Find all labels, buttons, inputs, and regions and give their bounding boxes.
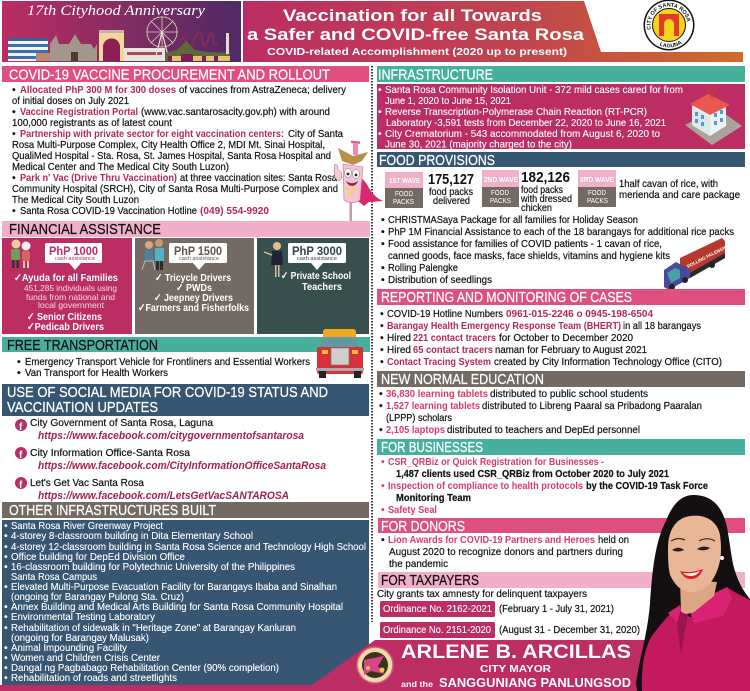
panel: project list: •: [4, 611, 8, 623]
card: PhP 1000: ✓Ayuda for all Families: [14, 272, 118, 284]
card: PhP 1500: ✓ PWDs: [176, 282, 212, 294]
text: third wave description: [619, 178, 740, 201]
panel: project list: •: [4, 652, 8, 664]
heading: NEW NORMAL EDUCATION: [381, 372, 544, 388]
heading: FOR TAXPAYERS: [381, 573, 479, 589]
panel: infrastructure list: Santa Rosa Community Isolation Unit - 372 mild cases cared for from: [385, 84, 683, 96]
section: reporting and monitoring: [377, 289, 745, 368]
link: City Government: City Government of Santa Rosa, Laguna: [30, 417, 213, 429]
divider: dotted centre line: [371, 66, 373, 622]
icon: syringe mascot: [334, 141, 383, 223]
panel: infrastructure list: City Crematorium - 543 accommodated from August 6, 2020 to: [385, 128, 660, 140]
bullet list: •: [12, 84, 16, 96]
card: PhP 3000: ✓ Private School: [281, 270, 351, 282]
bullet list: •: [381, 238, 385, 250]
bullet list: 0961-015-2246 o 0945-198-6504: [506, 308, 653, 320]
panel: project list: Rehabilitation of roads and streetlights: [11, 672, 177, 684]
text: third wave description: merienda and care package: [619, 189, 740, 201]
panel: project list: Women and Children Crisis Center: [11, 652, 160, 664]
bullet list: Safety Seal: [388, 504, 437, 516]
bullet list: •: [381, 456, 385, 468]
panel: project list: Office building for DepEd Division Office: [11, 551, 185, 563]
bullet list: naman for February to August 2021: [495, 344, 647, 356]
illustration: city skyline: [8, 16, 230, 61]
stat: 175,127: food packs: [429, 186, 473, 198]
bullet list: in all 18 barangays: [623, 320, 701, 332]
bullet list: •: [380, 308, 384, 320]
bullet list: Van Transport for Health Workers: [25, 367, 168, 379]
card: PhP 1000: [2, 238, 132, 334]
bullet list: CHRISTMASaya Package for all families for Holiday Season: [388, 214, 638, 226]
icon: jeepney: [316, 329, 364, 378]
text: third wave description: 1half cavan of rice, with: [619, 178, 718, 190]
panel: project list: Annex Building and Medical Arts Building for Santa Rosa Community Hospital: [11, 601, 343, 613]
smile: [680, 569, 703, 579]
bullet list: created by City Information Technology Office (CITO): [494, 356, 722, 368]
bullet list: Santa Rosa COVID-19 Vaccination Hotline: [20, 205, 197, 217]
stat: 175,127: [428, 171, 474, 207]
panel: project list: Dangal ng Pagbabago Rehabilitation Center (90% completion): [11, 662, 279, 674]
stat: 182,126: 182,126: [521, 169, 570, 186]
bullet list: Monitoring Team: [396, 492, 471, 504]
bullet list: •: [380, 320, 384, 332]
bullet list: Distribution of seedlings: [388, 274, 492, 286]
text: period two: (August 31 - December 31, 2020): [499, 624, 640, 636]
bullet list: 1,527 learning tablets: [386, 400, 480, 412]
heading: COVID-19 VACCINE PROCUREMENT AND ROLLOUT: [9, 68, 330, 84]
subtitle: COVID-related Accomplishment (2020 up to present): [267, 47, 567, 58]
bullet list: Allocated PhP 300 M for 300 doses: [20, 84, 176, 96]
panel: infrastructure list: June 30, 2021 (majority charged to the city): [385, 138, 572, 150]
bullet list: 221 contact tracers: [413, 332, 496, 344]
card: PhP 1500: ✓ Jeepney Drivers: [154, 292, 233, 304]
link: City Government: [15, 417, 304, 442]
badge: 1st wave: [385, 172, 423, 208]
bullet list: Food assistance for families of COVID patients - 1 cavan of rice,: [388, 238, 662, 250]
bullet list: •: [379, 388, 383, 400]
badge: ordinance 2162-2021: Ordinance No. 2162-2021: [383, 603, 492, 615]
stat: 182,126: with dressed: [520, 193, 572, 205]
portrait: mayor: [636, 495, 750, 691]
section: food provisions: [377, 152, 745, 290]
heading: OTHER INFRASTRUCTURES BUILT: [9, 503, 216, 519]
panel: project list: Santa Rosa Campus: [11, 571, 97, 583]
bullet list: [380, 308, 722, 368]
callout: cash assistance: [179, 256, 219, 262]
link: Let's Get Vac: f: [19, 480, 23, 491]
face: [668, 516, 721, 592]
icon: people: [142, 239, 164, 270]
bullet list: •: [12, 172, 16, 184]
bullet list: Vaccine Registration Portal: [20, 106, 138, 118]
bullet list: Medical Center and The Medical City South Luzon): [12, 161, 229, 173]
panel: anniversary banner: [2, 1, 241, 62]
panel: project list: •: [4, 551, 8, 563]
badge: 1st wave: FOOD: [395, 191, 413, 198]
card: PhP 1000: ✓ Senior Citizens: [27, 311, 102, 323]
panel: project list: Environmental Testing Laboratory: [11, 611, 156, 623]
icon: city seal: [644, 0, 694, 50]
panel: project list: Elevated Multi-Purpose Evacuation Facility for Barangays Ibaba and Sinalhan: [11, 581, 337, 593]
stat: 175,127: 175,127: [428, 171, 474, 188]
panel: infrastructure list: Reverse Transcription-Polymerase Chain Reaction (RT-PCR): [385, 106, 647, 118]
panel: project list: [2, 520, 369, 685]
stat: 182,126: food packs: [521, 184, 563, 196]
bullet list: Rosa Multi-Purpose Complex, City Health Office 2, MDI Mt. Sinai Hospital,: [12, 139, 325, 151]
link: City Government: https://www.facebook.com/citygovernmentofsantarosa: [38, 430, 304, 442]
bullet list: QualiMed Hospital - Sta. Rosa, St. James Hospital, Santa Rosa Hospital and: [12, 150, 331, 162]
panel: project list: •: [4, 561, 8, 573]
badge: 2nd wave: FOOD: [491, 190, 509, 197]
icon: city seal: LAGUNA: [660, 40, 682, 48]
bullet list: [17, 356, 310, 379]
bullet list: •: [381, 480, 385, 492]
link: Let's Get Vac: Let's Get Vac Santa Rosa: [30, 477, 144, 489]
role: city mayor: CITY MAYOR: [480, 664, 552, 675]
badge: 2nd wave: 2ND WAVE: [484, 177, 518, 184]
section: vaccine procurement and rollout: [2, 66, 369, 217]
badge: 2nd wave: [482, 170, 519, 207]
title line two: a Safer and COVID-free Santa Rosa: [247, 25, 585, 44]
bullet list: distributed to public school students: [490, 388, 648, 400]
panel: title banner: [243, 1, 743, 62]
panel: infrastructure list: Laboratory -3,591 tests from December 22, 2020 to June 16, 2021: [386, 117, 666, 129]
text: period one: (February 1 - July 31, 2021): [499, 603, 614, 615]
bullet text: August 2020 to recognize donors and partners during: [389, 546, 623, 558]
stat: 182,126: chicken: [521, 202, 552, 214]
bullet list: [12, 84, 347, 217]
link: City Information Office: f: [19, 450, 23, 461]
bullet list: 36,830 learning tablets: [386, 388, 488, 400]
link: Let's Get Vac: https://www.facebook.com/LetsGetVacSANTAROSA: [38, 490, 289, 502]
section: infrastructure: [377, 66, 745, 150]
line: and the Sangguniang Panlungsod: and the: [401, 679, 433, 689]
link: City Information Office: City Information Office-Santa Rosa: [30, 447, 190, 459]
bullet list: •: [381, 274, 385, 286]
bullet list: 65 contact tracers: [413, 344, 493, 356]
badge: 3rd wave: PACKS: [587, 198, 608, 205]
bullet list: Rolling Palengke: [388, 262, 458, 274]
badge: 1st wave: 1ST WAVE: [389, 178, 420, 185]
bullet list: 2,105 laptops: [386, 424, 445, 436]
heading: INFRASTRUCTURE: [378, 68, 493, 84]
panel: project list: (ongoing for Barangay Malusak): [11, 632, 149, 644]
bullet list: •: [381, 262, 385, 274]
panel: project list: (ongoing for Barangay Pulong Sta. Cruz): [11, 591, 184, 603]
bullet list: canned goods, face masks, face shields, vitamins and hygiene kits: [388, 250, 670, 262]
bullet list: •: [380, 356, 384, 368]
bullet text: held on: [598, 534, 629, 546]
heading: FOR DONORS: [381, 519, 465, 535]
callout: cash assistance: [297, 256, 337, 262]
bullet list: •: [381, 504, 385, 516]
bullet list: [381, 214, 734, 286]
earring: [720, 556, 724, 560]
panel: project list: •: [4, 662, 8, 674]
bullet list: 1,487 clients used CSR_QRBiz from October 2020 to July 2021: [396, 468, 669, 480]
heading: VACCINATION UPDATES: [7, 400, 158, 416]
heading: FOOD PROVISIONS: [379, 153, 495, 169]
bullet list: Inspection of compliance to health protocols: [388, 480, 583, 492]
bullet list: •: [380, 344, 384, 356]
icon: senior couple: [11, 240, 30, 268]
section: for taxpayers: [377, 572, 745, 638]
callout: PhP 1000: [49, 246, 98, 258]
section: social media: [2, 384, 369, 502]
bullet list: 100,000 registrants as of latest count: [12, 117, 172, 129]
heading: FINANCIAL ASSISTANCE: [9, 222, 161, 238]
panel: infrastructure list: •: [378, 106, 382, 118]
badge: ordinance 2162-2021: [380, 601, 495, 617]
panel: project list: •: [4, 622, 8, 634]
bullet list: at three vaccination sites: Santa Rosa: [180, 172, 337, 184]
icon: teacher: [264, 242, 283, 277]
brows and eyes: [671, 539, 715, 552]
panel: project list: 4-storey 8-classroom building in Dita Elementary School: [11, 530, 253, 542]
text: tax amnesty: City grants tax amnesty for delinquent taxpayers: [377, 588, 587, 600]
bullet list: Partnership with private sector for eight vaccination centers:: [20, 128, 284, 140]
callout: [45, 243, 102, 270]
bullet text: •: [381, 534, 385, 546]
panel: project list: 4-storey 12-classroom building in Santa Rosa Science and Technology High School: [11, 541, 366, 553]
bullet list: Emergency Transport Vehicle for Frontliners and Essential Workers: [25, 356, 310, 368]
bullet list: COVID-19 Hotline Numbers: [387, 308, 503, 320]
bullet list: by the COVID-19 Task Force: [586, 480, 708, 492]
line: and the Sangguniang Panlungsod: SANGGUNIANG PANLUNGSOD: [439, 675, 631, 690]
bullet list: [381, 456, 708, 516]
panel: infrastructure list: June 1, 2020 to June 15, 2021: [385, 95, 511, 107]
panel: project list: Animal Impounding Facility: [11, 642, 128, 654]
bullet list: Barangay Health Emergency Response Team (BHERT): [387, 320, 621, 332]
badge: 3rd wave: [578, 170, 616, 207]
card: PhP 1000: ✓Pedicab Drivers: [27, 321, 104, 333]
bullet list: for October to December 2020: [499, 332, 633, 344]
callout: cash assistance: [55, 256, 95, 262]
section: other infrastructures built: [2, 502, 369, 685]
callout: PhP 3000: [292, 246, 342, 258]
name: Arlene B. Arcillas: ARLENE B. ARCILLAS: [401, 642, 631, 663]
bullet text: the pandemic: [389, 558, 448, 570]
panel: project list: •: [4, 601, 8, 613]
card: PhP 3000: Teachers: [302, 281, 342, 293]
bullet list: distributed to teachers and DepEd personnel: [447, 424, 640, 436]
bullet list: •: [381, 214, 385, 226]
bullet list: •: [12, 106, 16, 118]
panel: project list: •: [4, 581, 8, 593]
badge: 3rd wave: FOOD: [588, 190, 606, 197]
bullet list: Contact Tracing System: [387, 356, 491, 368]
card: PhP 1500: ✓Farmers and Fisherfolks: [138, 302, 249, 314]
icon: sangguniang seal: [357, 647, 393, 683]
bullet text: [381, 534, 629, 570]
card: PhP 1000: funds from national and: [26, 292, 115, 302]
bullet list: The Medical City South Luzon: [12, 194, 139, 206]
card: PhP 1500: [135, 238, 254, 334]
panel: infrastructure list: [377, 84, 745, 150]
panel: project list: Santa Rosa River Greenway Project: [11, 520, 163, 532]
bullet list: (LPPP) scholars: [386, 412, 452, 424]
icon: isolation building: [685, 86, 742, 145]
panel: project list: Rehabilitation of sidewalk in "Heritage Zone" at Barangay Kanluran: [11, 622, 296, 634]
title line one: Vaccination for all Towards: [283, 6, 542, 25]
bullet list: •: [379, 400, 383, 412]
shirt: [642, 587, 750, 691]
bullet list: (049) 554-9920: [200, 205, 269, 217]
icon: rolling palengke truck: ROLLING PALENGKE: [686, 243, 730, 269]
panel: project list: 16-classroom building for Polytechnic University of the Philippines: [11, 561, 295, 573]
panel: infrastructure list: •: [378, 84, 382, 96]
bullet list: Hired: [387, 332, 411, 344]
bullet list: •: [381, 226, 385, 238]
heading: 17th Cityhood Anniversary: 17th Cityhood Anniversary: [27, 3, 205, 19]
panel: infrastructure list: •: [378, 128, 382, 140]
stat: 182,126: [520, 169, 572, 214]
bullet list: •: [17, 356, 21, 368]
bullet list: •: [379, 424, 383, 436]
bullet list: •: [12, 128, 16, 140]
heading: USE OF SOCIAL MEDIA FOR COVID-19 STATUS AND: [7, 385, 328, 401]
link: City Information Office: [15, 447, 326, 472]
panel: project list: •: [4, 520, 8, 532]
icon: rolling palengke truck: [664, 238, 730, 290]
section: for donors: [378, 518, 745, 570]
icon: city seal: CITY OF SANTA ROSA: [646, 2, 690, 30]
badge: 3rd wave: 3RD WAVE: [580, 177, 614, 184]
heading: REPORTING AND MONITORING OF CASES: [381, 290, 632, 306]
heading: [7, 385, 328, 416]
bullet list: (www.vac.santarosacity.gov.ph) with around: [141, 106, 330, 118]
panel: project list: •: [4, 642, 8, 654]
panel: project list: •: [4, 672, 8, 684]
bullet list: [379, 388, 702, 436]
heading: FREE TRANSPORTATION: [7, 338, 158, 354]
link: City Information Office: https://www.facebook.com/CityInformationOfficeSantaRosa: [38, 460, 326, 472]
footer band: [0, 640, 750, 691]
neck: [680, 580, 717, 614]
link: Let's Get Vac: [15, 477, 289, 502]
callout: PhP 1500: [174, 246, 222, 258]
badge: 1st wave: PACKS: [393, 199, 414, 206]
callout: [169, 243, 227, 270]
badge: ordinance 2151-2020: Ordinance No. 2151-2020: [383, 624, 491, 636]
bullet list: City of Santa: [288, 128, 343, 140]
link: City Government: f: [19, 422, 23, 433]
badge: 2nd wave: PACKS: [490, 198, 511, 205]
card: PhP 1000: 451,285 individuals using: [24, 283, 117, 293]
section: for businesses: [377, 439, 745, 516]
badge: ordinance 2151-2020: [380, 622, 495, 638]
bullet list: •: [380, 332, 384, 344]
bullet list: •: [17, 367, 21, 379]
section: new normal education: [377, 371, 745, 436]
card: PhP 1000: local government: [38, 300, 105, 310]
callout: [288, 243, 346, 270]
hair: [636, 495, 750, 691]
stat: 175,127: delivered: [433, 195, 470, 207]
card: PhP 1500: ✓ Tricycle Drivers: [155, 272, 231, 284]
bullet list: •: [12, 205, 16, 217]
section: financial assistance: [2, 221, 370, 334]
bullet list: CSR_QRBiz or Quick Registration for Businesses -: [388, 456, 604, 468]
bullet text: Lion Awards for COVID-19 Partners and Heroes: [388, 534, 595, 546]
heading: FOR BUSINESSES: [381, 440, 483, 456]
bullet list: of initial doses on July 2021: [12, 95, 129, 107]
card: PhP 3000: [257, 238, 369, 334]
panel: project list: •: [4, 541, 8, 553]
panel: project list: •: [4, 530, 8, 542]
bullet list: of vaccines from AstraZeneca; delivery: [179, 84, 347, 96]
bullet list: Community Hospital (SRCH), City of Santa Rosa Multi-Purpose Complex and: [12, 183, 338, 195]
bullet list: Park n' Vac (Drive Thru Vaccination): [20, 172, 177, 184]
bullet list: Hired: [387, 344, 411, 356]
section: free transportation: [2, 329, 370, 379]
bullet list: distributed to Libreng Paaral sa Pribadong Paaralan: [482, 400, 702, 412]
